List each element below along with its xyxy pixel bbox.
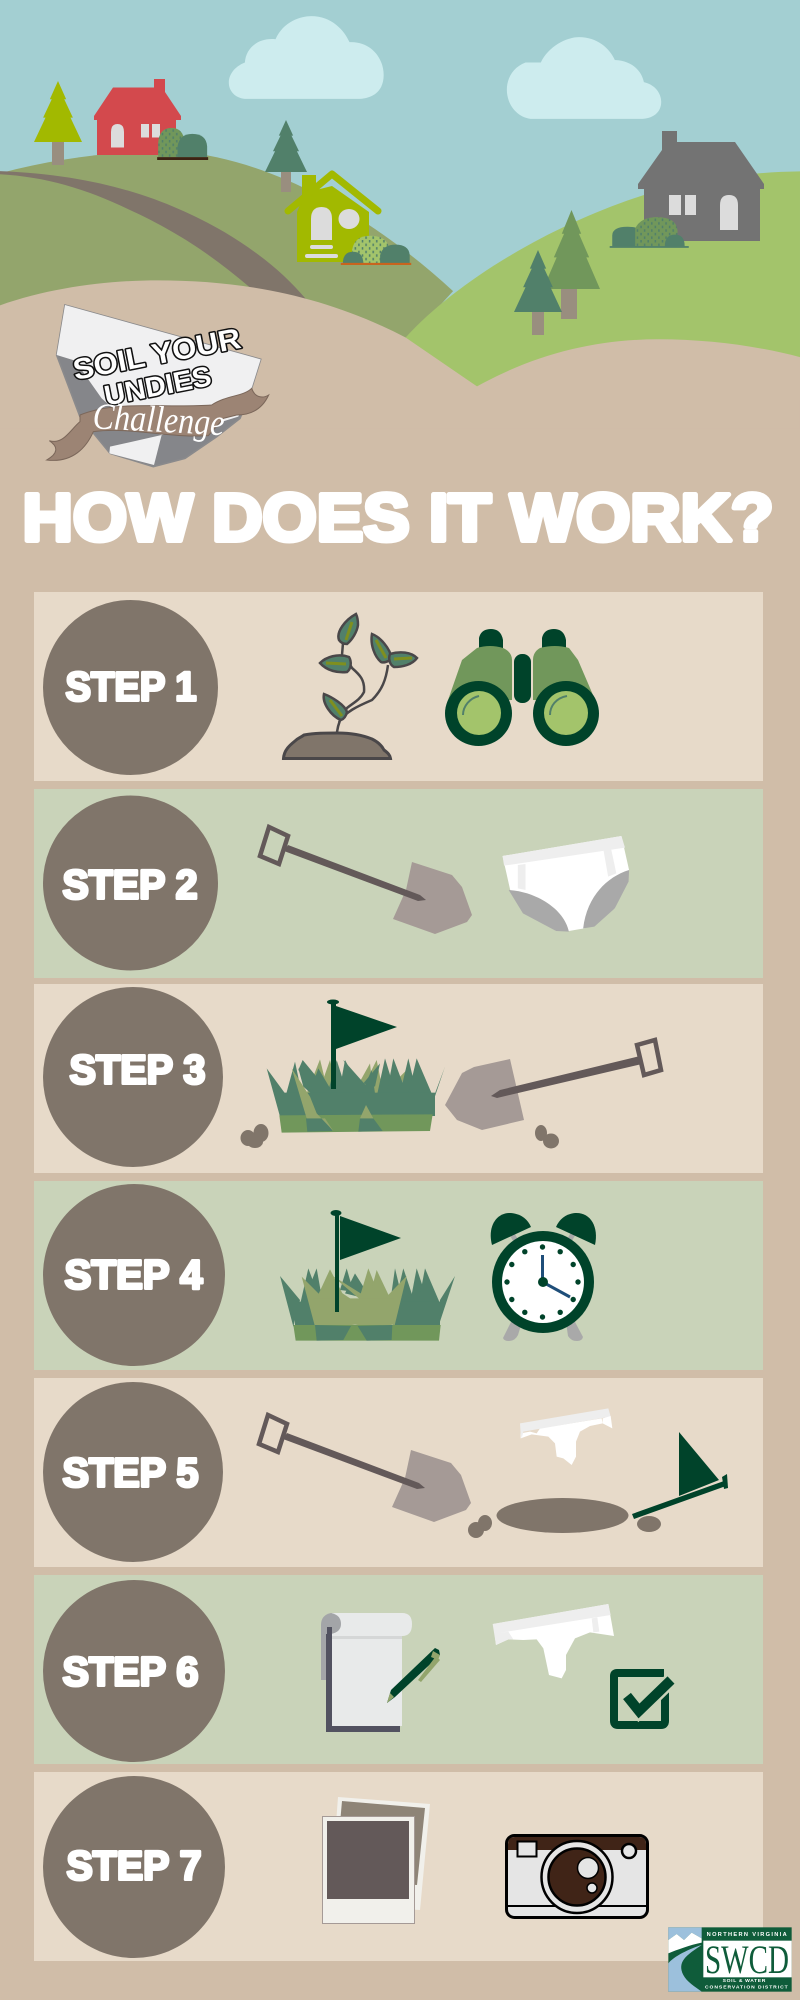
winding path [0, 171, 306, 299]
step 4 badge [43, 1184, 225, 1366]
panel: step 5 [34, 1378, 763, 1567]
bushes by grey house [610, 217, 689, 248]
logo title text [70, 322, 249, 416]
icon: soil clods [468, 1515, 661, 1538]
house: lime [288, 174, 378, 262]
logo undies grey base [57, 305, 261, 467]
right hill [406, 171, 800, 400]
panel: step 6 [34, 1575, 763, 1764]
step 4 badge: STEP 4 [64, 1252, 203, 1298]
logo undies white lower [109, 435, 162, 465]
icon: camera [506, 1836, 648, 1918]
logo white hillside [668, 1933, 702, 1953]
icon: clean underwear [503, 836, 629, 932]
step 5 badge [43, 1382, 223, 1562]
icon: shovel [259, 1415, 471, 1522]
panel: step 7 [34, 1772, 763, 1961]
icon: decomposed underwear [520, 1408, 612, 1465]
logo title text: UNDIES [102, 360, 214, 411]
house: grey [638, 131, 764, 241]
foreground ground [0, 280, 800, 429]
logo ribbon [47, 388, 269, 460]
tree: lime [34, 81, 82, 165]
step 6 badge: STEP 6 [62, 1648, 198, 1694]
panel: step 1 [34, 592, 763, 781]
icon: grass with flag [280, 1268, 455, 1341]
icon: checkbox [614, 1673, 671, 1725]
logo: Northern Virginia SWCD [668, 1927, 792, 1992]
icon: photographs [322, 1797, 430, 1924]
step 1 badge [43, 600, 218, 775]
cloud left [229, 16, 384, 99]
house: red [94, 79, 181, 155]
icon: shovel [260, 827, 472, 934]
icon: soil clods [240, 1124, 559, 1148]
icon: flag [330, 1210, 401, 1312]
cloud right [507, 37, 661, 119]
step 2 badge: STEP 2 [62, 862, 198, 908]
step 3 badge [43, 987, 223, 1167]
icon: hole in ground [496, 1498, 628, 1533]
icon: decomposed underwear [493, 1604, 614, 1678]
step 7 badge [43, 1776, 225, 1958]
landscape scene [0, 0, 800, 429]
step 1 badge: STEP 1 [66, 664, 196, 710]
panel: step 3 [34, 984, 763, 1173]
tree: mid green [543, 210, 600, 319]
step 2 badge [43, 796, 218, 970]
bushes by red house [157, 128, 208, 160]
tree: dark green lower [514, 250, 562, 335]
icon: grass [267, 1058, 445, 1133]
logo river [668, 1945, 702, 1992]
panel: step 2 [34, 789, 763, 978]
logo background [668, 1927, 792, 1992]
icon: binoculars [445, 629, 599, 746]
logo top line: NORTHERN VIRGINIA [707, 1932, 787, 1938]
tree: dark green top [265, 120, 307, 192]
logo title text: SOIL YOUR [70, 322, 243, 387]
bushes by lime house [341, 236, 411, 265]
icon: alarm clock [491, 1213, 596, 1341]
logo challenge script: Challenge [92, 396, 225, 444]
step 7 badge: STEP 7 [66, 1842, 202, 1888]
logo undies white upper [57, 305, 261, 435]
logo sky and mountain [668, 1927, 702, 1940]
back hill left [0, 152, 453, 343]
icon: flag in grass [327, 1000, 397, 1089]
logo bottom line: CONSERVATION DISTRICT [705, 1985, 788, 1991]
icon: fallen flag [632, 1432, 728, 1519]
step 6 badge [43, 1580, 225, 1762]
logo white box [703, 1941, 792, 1977]
icon: shovel pointing left [445, 1040, 661, 1130]
icon: notepad and pen [321, 1613, 440, 1732]
logo: Soil Your Undies Challenge [47, 305, 269, 467]
step 5 badge: STEP 5 [62, 1450, 198, 1496]
logo middle line: SOIL & WATER [723, 1978, 766, 1984]
sky [0, 0, 800, 400]
step 3 badge: STEP 3 [70, 1046, 206, 1092]
title: HOW DOES IT WORK? [22, 480, 774, 556]
icon: seedling [284, 614, 417, 758]
panel: step 4 [34, 1181, 763, 1370]
